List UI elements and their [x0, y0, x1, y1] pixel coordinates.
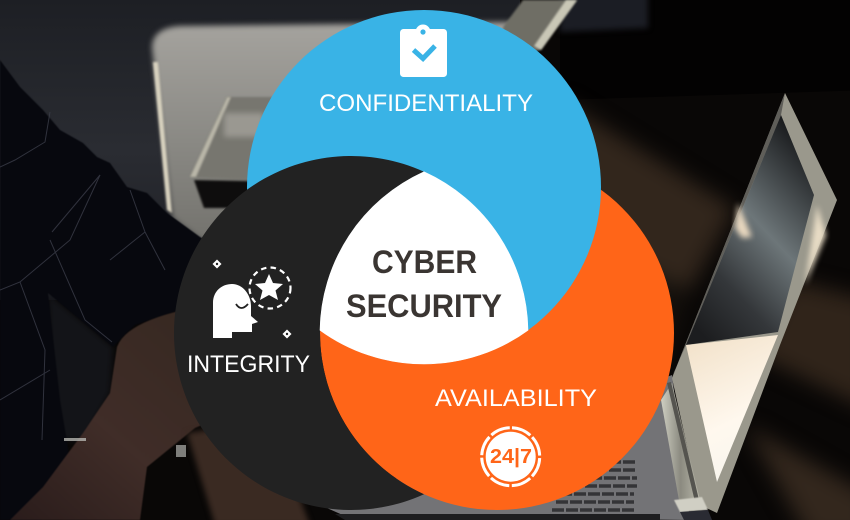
- laptop hinge bar: [661, 383, 700, 506]
- title: cyber security: SECURITY: [346, 288, 502, 324]
- panel: Venn diagram: [174, 10, 674, 510]
- chair behind arm: [48, 293, 113, 440]
- title: cyber security: [346, 244, 502, 324]
- icon: 24/7 badge: 24|7: [490, 446, 532, 468]
- arm: [10, 300, 260, 520]
- back table: [152, 22, 520, 260]
- back laptop lid: [503, 0, 577, 60]
- front laptop base: [320, 375, 690, 520]
- title: cyber security: CYBER: [372, 244, 477, 280]
- circle: confidentiality: [247, 10, 601, 364]
- circle: integrity: [174, 156, 424, 510]
- label: availability: AVAILABILITY: [435, 385, 597, 412]
- label: confidentiality: CONFIDENTIALITY: [319, 90, 533, 117]
- wood bands: [560, 100, 850, 520]
- icon: head with star: [212, 260, 292, 338]
- icon: 24/7 badge: [482, 428, 540, 486]
- centre overlap: white: [320, 172, 528, 364]
- label: integrity: INTEGRITY: [187, 351, 310, 378]
- front laptop lid: [672, 93, 837, 513]
- circle: availability: [320, 156, 674, 510]
- icon: clipboard with check: [400, 24, 447, 77]
- shirt: [0, 60, 240, 520]
